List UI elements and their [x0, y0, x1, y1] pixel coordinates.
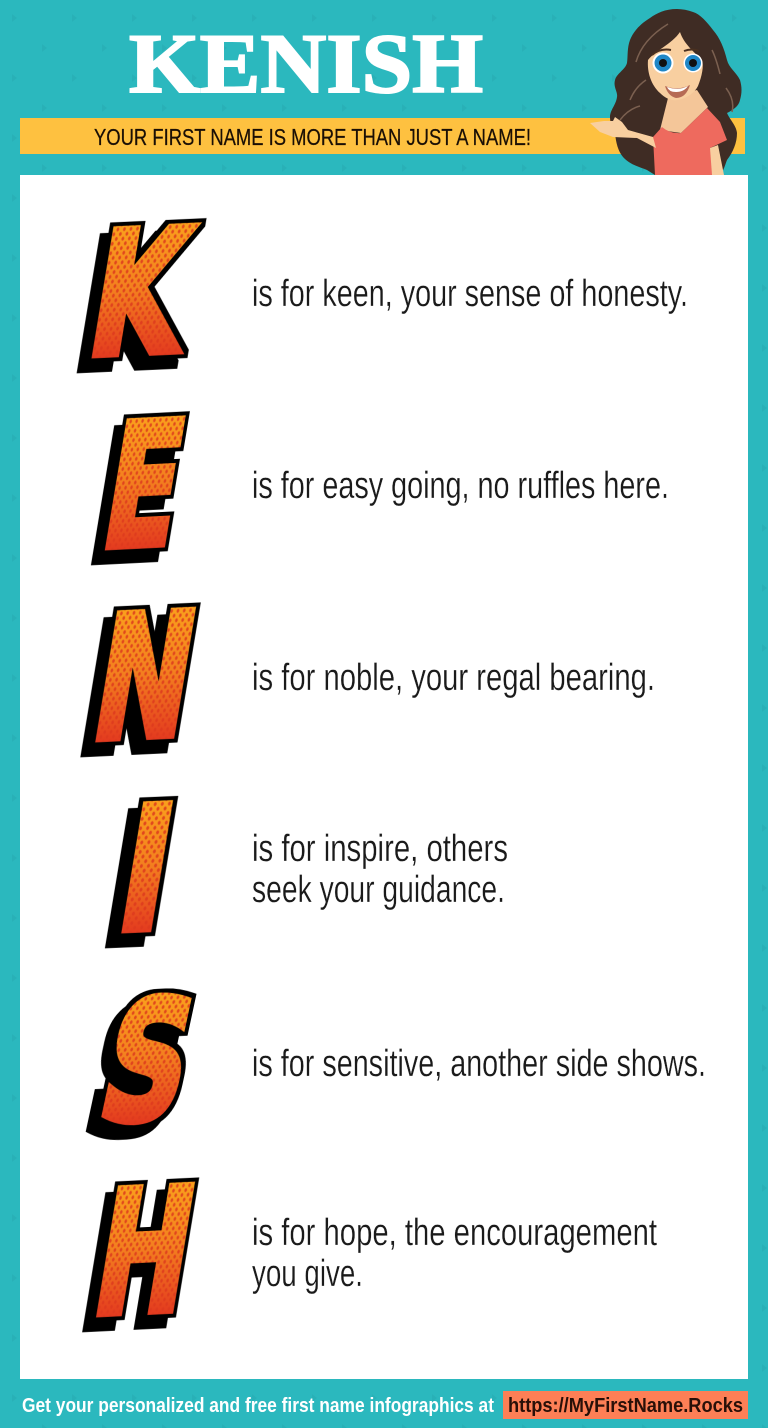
white panel: [20, 175, 748, 1379]
row K: [77, 193, 688, 395]
row I: seek your guidance.: [252, 869, 505, 911]
letter H: H: [82, 1152, 208, 1355]
character illustration: [590, 9, 742, 175]
title: KENISH: [129, 17, 483, 111]
text N: is for noble, your regal bearing.: [252, 657, 655, 699]
row H: you give.: [252, 1253, 363, 1295]
mouth: [665, 85, 690, 98]
letter K: K: [77, 193, 206, 395]
footer: [22, 1391, 748, 1419]
hair highlights: [620, 24, 733, 120]
letter I: I: [106, 770, 187, 970]
row H: [82, 1152, 657, 1355]
arm and hand: [590, 117, 656, 148]
row I: [106, 770, 508, 970]
text H: is for hope, the encouragement: [252, 1212, 657, 1254]
tagline band: YOUR FIRST NAME IS MORE THAN JUST A NAME!: [94, 124, 531, 150]
face: [648, 32, 703, 100]
neck: [660, 90, 708, 133]
footer text: Get your personalized and free first name infographics at: [22, 1395, 494, 1417]
row E: [91, 384, 669, 587]
left eye: [652, 52, 674, 74]
eyebrows: [652, 50, 699, 55]
letter S: S: [85, 964, 210, 1161]
letter N: N: [81, 576, 209, 780]
right eye: [684, 54, 702, 72]
text I: is for inspire, others: [252, 828, 508, 870]
right arm: [710, 145, 724, 175]
hair: [610, 9, 742, 175]
shirt: [653, 108, 727, 175]
tagline band: [20, 118, 745, 154]
url badge: [503, 1391, 748, 1419]
row N: [81, 576, 655, 780]
letter E: E: [91, 384, 197, 587]
url text: https://MyFirstName.Rocks: [508, 1395, 743, 1417]
row S: [85, 964, 706, 1161]
